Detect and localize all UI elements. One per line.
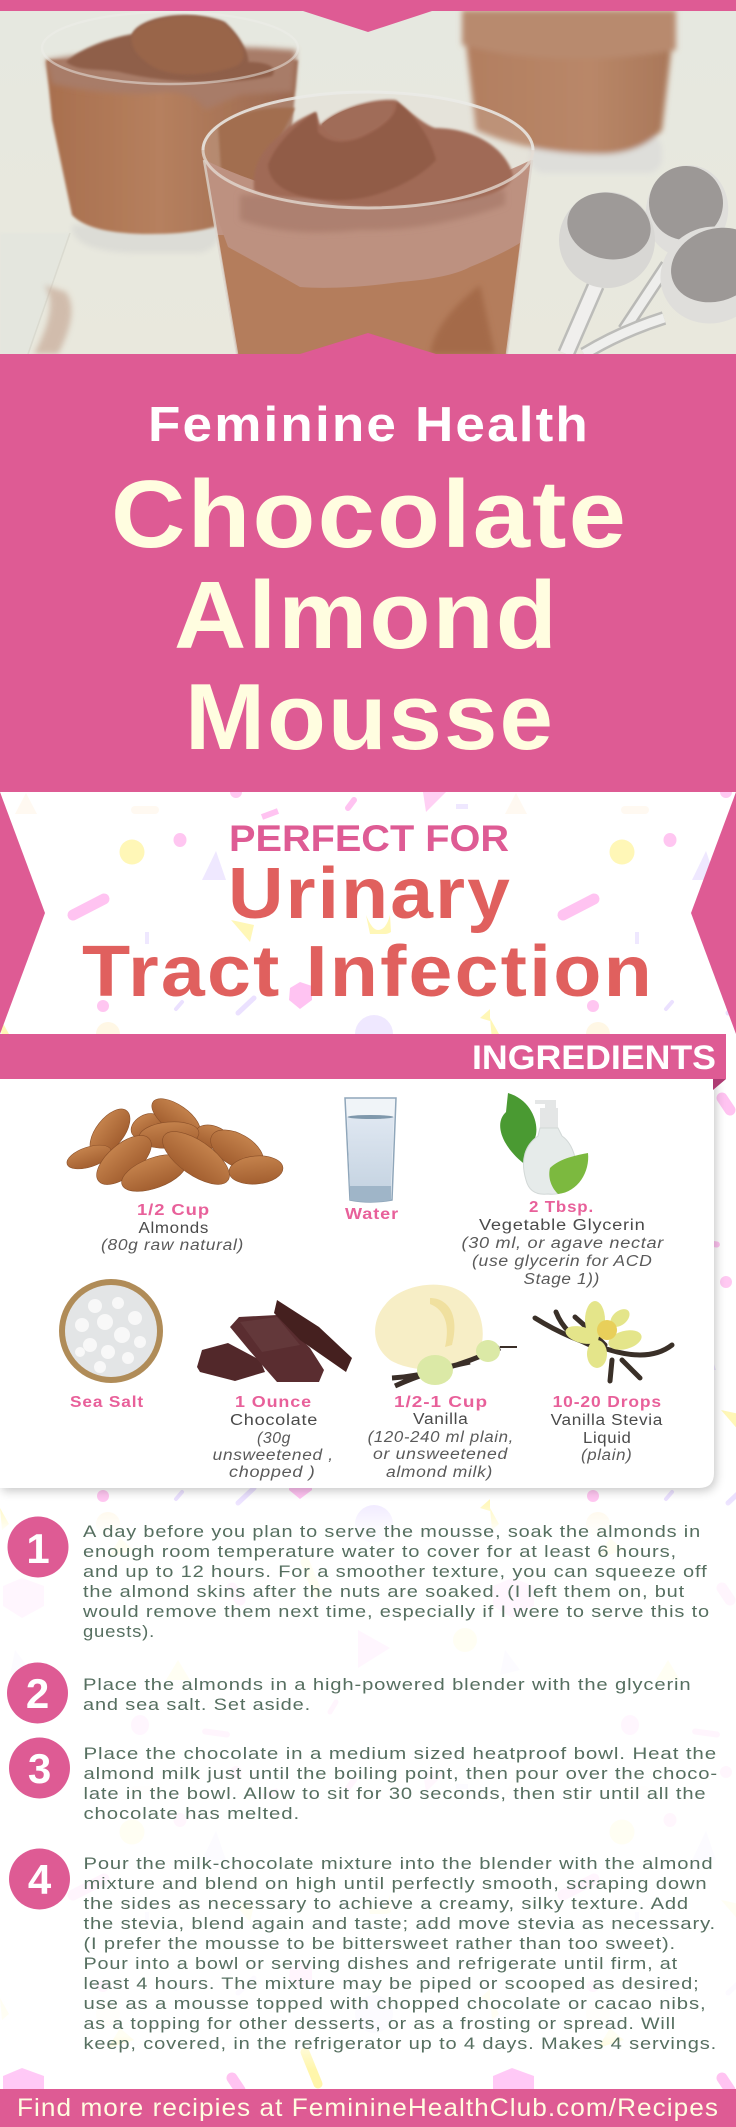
number badge 2 bbox=[7, 1662, 68, 1724]
kicker: Feminine Health: Feminine Health bbox=[148, 398, 590, 452]
icon: sea salt bowl bbox=[59, 1279, 163, 1383]
number badge 3: 3 bbox=[28, 1745, 51, 1792]
back left glass bbox=[42, 12, 298, 253]
back right glass bbox=[462, 10, 676, 173]
step 4 text: Pour into a bowl or serving dishes and refrigerate until firm, at bbox=[84, 1955, 678, 1973]
label: 1/2-1 Cup Vanilla: or unsweetened bbox=[373, 1446, 509, 1463]
step 3 text: late in the bowl. Allow to sit for 30 seconds, then stir until all the bbox=[84, 1785, 706, 1803]
label: 2 Tbsp. Vegetable Glycerin: 2 Tbsp. bbox=[529, 1199, 594, 1216]
label: 10-20 Drops Vanilla Stevia: Vanilla Stevia bbox=[551, 1412, 663, 1429]
step 4 text: least 4 hours. The mixture may be piped or scooped as desired; bbox=[84, 1975, 700, 1993]
label: 1 Ounce Chocolate bbox=[213, 1394, 334, 1481]
step 4 text: the sides as necessary to achieve a creamy, silky texture. Add bbox=[84, 1895, 689, 1913]
label: 2 Tbsp. Vegetable Glycerin: Vegetable Glycerin bbox=[479, 1217, 646, 1234]
spoons bbox=[550, 157, 736, 354]
step 4 text: use as a mousse topped with chopped chocolate or cacao nibs, bbox=[84, 1995, 706, 2013]
label: 1 Ounce Chocolate: Chocolate bbox=[230, 1412, 318, 1429]
step 1 text bbox=[82, 1523, 710, 1641]
icon: glycerin bottle with leaves bbox=[500, 1093, 588, 1194]
label: 1 Ounce Chocolate: 1 Ounce bbox=[235, 1394, 312, 1411]
label: 1/2 Cup Almonds: (80g raw natural) bbox=[101, 1237, 244, 1254]
number badge 1: 1 bbox=[26, 1525, 50, 1572]
front glass bbox=[200, 92, 540, 360]
step 4 text: keep, covered, in the refrigerator up to 4 days. Makes 4 servings. bbox=[84, 2035, 717, 2053]
footer link text: Find more recipies at FeminineHealthClub.com/Recipes bbox=[17, 2094, 719, 2122]
icon: chocolate pieces bbox=[197, 1300, 352, 1382]
step 1 text: would remove them next time, especially if I were to serve this to bbox=[82, 1603, 710, 1621]
photo: chocolate mousse glasses bbox=[0, 0, 736, 360]
label: 2 Tbsp. Vegetable Glycerin bbox=[462, 1199, 664, 1288]
ingredients card bbox=[0, 1079, 716, 1491]
step 4 text: (I prefer the mousse to be bittersweet rather than too sweet). bbox=[84, 1935, 676, 1953]
step 1 text: A day before you plan to serve the mousse, soak the almonds in bbox=[83, 1523, 701, 1541]
icon: vanilla ice cream bbox=[375, 1285, 517, 1386]
label: 1 Ounce Chocolate: chopped ) bbox=[229, 1464, 316, 1481]
heading: INGREDIENTS: INGREDIENTS bbox=[472, 1039, 716, 1077]
label: 1/2-1 Cup Vanilla: (120-240 ml plain, bbox=[368, 1429, 514, 1446]
icon: water glass bbox=[345, 1098, 396, 1202]
label: 1 Ounce Chocolate: (30g bbox=[257, 1430, 291, 1447]
label: 10-20 Drops Vanilla Stevia: (plain) bbox=[581, 1447, 632, 1464]
title: Chocolate Almond Mousse: Mousse bbox=[185, 664, 555, 769]
step 1 text: and up to 12 hours. For a smoother texture, you can squeeze off bbox=[83, 1563, 708, 1581]
ribbon heading bbox=[82, 818, 654, 1012]
step 4 text: mixture and blend on high until perfectly smooth, scraping down bbox=[84, 1875, 708, 1893]
number badge 4: 4 bbox=[28, 1856, 52, 1903]
title: Chocolate Almond Mousse: Chocolate bbox=[111, 461, 628, 568]
footer bar bbox=[0, 2089, 736, 2127]
label: 2 Tbsp. Vegetable Glycerin: (30 ml, or agave nectar bbox=[462, 1235, 664, 1252]
ingredients banner bbox=[0, 1034, 726, 1090]
top band with chevron bbox=[0, 0, 736, 32]
step 3 text: almond milk just until the boiling point, then pour over the choco- bbox=[84, 1765, 718, 1783]
icon: vanilla beans and flower bbox=[535, 1301, 672, 1381]
title: Chocolate Almond Mousse: Almond bbox=[174, 562, 559, 669]
step 1 text: the almond skins after the nuts are soaked. (I left them on, but bbox=[83, 1583, 685, 1601]
title panel bbox=[0, 333, 736, 792]
ribbon notches bbox=[0, 792, 736, 1034]
step 2 text: Place the almonds in a high-powered blender with the glycerin bbox=[83, 1676, 692, 1694]
number badge 2: 2 bbox=[26, 1670, 49, 1717]
label: 2 Tbsp. Vegetable Glycerin: Stage 1)) bbox=[524, 1271, 600, 1288]
label: 10-20 Drops Vanilla Stevia bbox=[551, 1394, 663, 1464]
step 3 text bbox=[84, 1745, 718, 1823]
ribbon heading: PERFECT FOR bbox=[229, 818, 509, 859]
step 1 bbox=[8, 1516, 710, 1641]
label: 1/2-1 Cup Vanilla: almond milk) bbox=[386, 1464, 493, 1481]
icon: almonds bbox=[64, 1091, 284, 1199]
step 3 bbox=[9, 1738, 718, 1823]
title: Chocolate Almond Mousse bbox=[111, 461, 628, 769]
ribbon heading: Urinary bbox=[228, 854, 512, 934]
step 1 text: enough room temperature water to cover for at least 6 hours, bbox=[83, 1543, 677, 1561]
number badge 3 bbox=[9, 1738, 70, 1798]
step 4 bbox=[9, 1848, 717, 2053]
step 2 text: and sea salt. Set aside. bbox=[83, 1696, 311, 1714]
step 1 text: guests). bbox=[83, 1623, 155, 1641]
ribbon heading: Tract Infection bbox=[82, 932, 654, 1012]
step 4 text: Pour the milk-chocolate mixture into the blender with the almond bbox=[84, 1855, 714, 1873]
label: 2 Tbsp. Vegetable Glycerin: (use glycerin for ACD bbox=[472, 1253, 652, 1270]
label: 1 Ounce Chocolate: unsweetened , bbox=[213, 1447, 334, 1464]
label: 1/2 Cup Almonds: 1/2 Cup bbox=[137, 1202, 210, 1219]
label: 1/2-1 Cup Vanilla: Vanilla bbox=[413, 1411, 468, 1428]
step 4 text: as a topping for other desserts, or as a frosting or spread. Will bbox=[84, 2015, 676, 2033]
label: 1/2 Cup Almonds bbox=[101, 1202, 244, 1254]
label: 1/2-1 Cup Vanilla: 1/2-1 Cup bbox=[394, 1394, 488, 1411]
label: 1/2 Cup Almonds: Almonds bbox=[138, 1220, 209, 1237]
step 2 bbox=[7, 1662, 692, 1724]
label: 10-20 Drops Vanilla Stevia: 10-20 Drops bbox=[553, 1394, 662, 1411]
confetti background bbox=[0, 792, 736, 2089]
label: Sea Salt: Sea Salt bbox=[70, 1394, 144, 1411]
step 3 text: Place the chocolate in a medium sized heatproof bowl. Heat the bbox=[84, 1745, 717, 1763]
label: 1/2-1 Cup Vanilla bbox=[368, 1394, 514, 1481]
step 3 text: chocolate has melted. bbox=[84, 1805, 300, 1823]
step 2 text bbox=[83, 1676, 692, 1714]
label: Water: Water bbox=[345, 1206, 399, 1223]
label: 10-20 Drops Vanilla Stevia: Liquid bbox=[583, 1430, 632, 1447]
number badge 4 bbox=[9, 1848, 70, 1910]
number badge 1 bbox=[8, 1516, 68, 1578]
step 4 text bbox=[84, 1855, 717, 2053]
step 4 text: the stevia, blend again and taste; add move stevia as necessary. bbox=[84, 1915, 716, 1933]
